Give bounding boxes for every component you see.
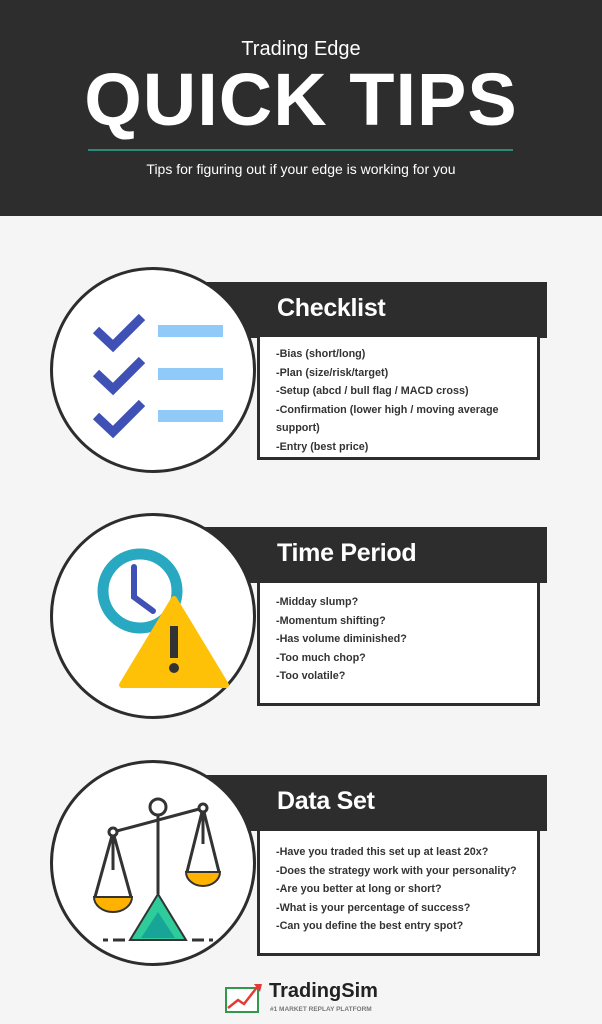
logo: TradingSim [269,980,378,1002]
panel: data set: -Can you define the best entry spot? [276,920,463,932]
icon: clock and warning [50,513,256,719]
panel: data set [50,760,547,966]
title: QUICK TIPS [84,58,518,141]
panel: checklist: Checklist [277,294,385,322]
divider line [88,149,513,151]
logo [225,980,378,1013]
tagline: Tips for figuring out if your edge is working for you [146,161,456,177]
panel: time period [50,513,547,719]
panel: checklist: -Bias (short/long) [276,348,365,360]
panel: checklist: -Setup (abcd / bull flag / MACD cross) [276,385,469,397]
icon: scale [50,760,256,966]
icon: logo chart [225,984,262,1013]
panel: checklist: -Entry (best price) [276,440,368,452]
panel: checklist: -Confirmation (lower high / moving average support) [276,404,499,434]
panel: time period: -Too volatile? [276,670,345,682]
panel: data set: -Does the strategy work with your personality? [276,864,517,876]
panel: time period: Time Period [277,539,416,567]
panel: data set: Data Set [277,787,375,815]
panel: time period: -Momentum shifting? [276,614,386,626]
panel: data set: -Are you better at long or short? [276,883,442,895]
header [0,0,602,216]
icon: checklist [50,267,256,473]
header subtitle top: Trading Edge [241,38,361,60]
panel: data set: -Have you traded this set up at least 20x? [276,846,488,858]
panel: data set: -What is your percentage of success? [276,902,470,914]
logo: #1 MARKET REPLAY PLATFORM [270,1006,372,1013]
panel: time period: -Midday slump? [276,596,358,608]
panel: checklist [50,267,547,473]
panel: time period: -Has volume diminished? [276,633,407,645]
panel: checklist: -Plan (size/risk/target) [276,366,388,378]
panel: time period: -Too much chop? [276,652,366,664]
